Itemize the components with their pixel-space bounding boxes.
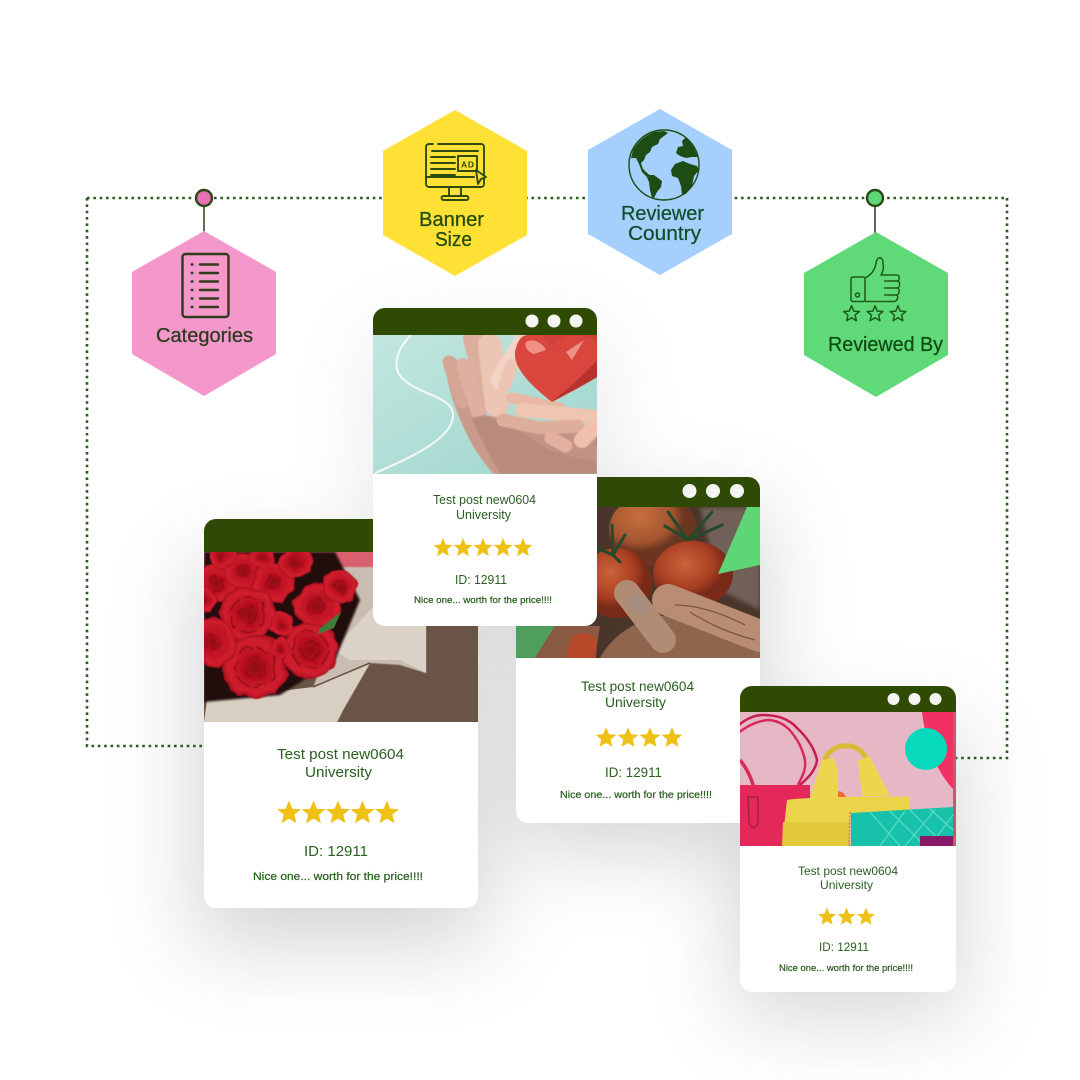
comment: Nice one... worth for the price!!!! <box>779 963 913 973</box>
window dots <box>682 484 744 498</box>
card: tomatoes <box>516 477 760 823</box>
window dots <box>526 314 582 328</box>
subtitle: University <box>820 878 873 892</box>
title: Test post new0604 <box>277 746 404 763</box>
hexagon: Reviewer Country: Country <box>628 223 701 245</box>
star rating <box>434 538 532 556</box>
photo: roses <box>204 552 478 722</box>
header bar <box>373 308 597 335</box>
icon: globe <box>629 130 699 200</box>
icon: list document <box>182 254 228 317</box>
label: Reviewer Country: Reviewer <box>621 203 704 225</box>
photo: handbags <box>738 712 956 846</box>
title: Test post new0604 <box>581 679 694 694</box>
card: heart in hands <box>373 308 597 626</box>
header bar <box>740 686 956 712</box>
comment: Nice one... worth for the price!!!! <box>414 595 552 605</box>
hexagon: Categories <box>132 190 276 396</box>
star rating <box>818 908 875 925</box>
title: Test post new0604 <box>433 493 536 507</box>
dotted connector frame <box>87 198 1007 758</box>
hexagon: Banner Size <box>383 110 527 276</box>
comment: Nice one... worth for the price!!!! <box>253 871 423 883</box>
ad tag: AD <box>461 160 474 170</box>
header bar <box>516 477 760 507</box>
hexagon: Reviewed By <box>804 190 948 397</box>
window dots <box>888 693 942 705</box>
photo: tomatoes <box>516 494 760 658</box>
subtitle: University <box>456 508 512 522</box>
star rating <box>277 800 399 823</box>
header bar <box>204 519 478 552</box>
icon: monitor with ad <box>426 144 486 200</box>
icon: thumbs up with stars <box>844 258 906 321</box>
photo: heart in hands <box>373 335 597 474</box>
star rating <box>596 727 682 747</box>
label: Categories: Categories <box>156 325 253 347</box>
soft card shadows <box>195 340 960 1015</box>
id: ID: 12911 <box>819 940 869 954</box>
id: ID: 12911 <box>605 765 662 780</box>
id: ID: 12911 <box>455 573 507 587</box>
hexagon: Banner Size: Size <box>435 229 472 251</box>
subtitle: University <box>605 695 666 710</box>
id: ID: 12911 <box>304 843 368 860</box>
label: Reviewed By: Reviewed By <box>828 334 943 356</box>
title: Test post new0604 <box>798 864 898 878</box>
card: handbags <box>738 686 956 992</box>
subtitle: University <box>305 764 372 781</box>
hexagon: Reviewer Country <box>588 109 732 275</box>
label: Banner Size: Banner <box>419 209 484 231</box>
comment: Nice one... worth for the price!!!! <box>560 790 712 801</box>
card: roses <box>187 519 478 908</box>
